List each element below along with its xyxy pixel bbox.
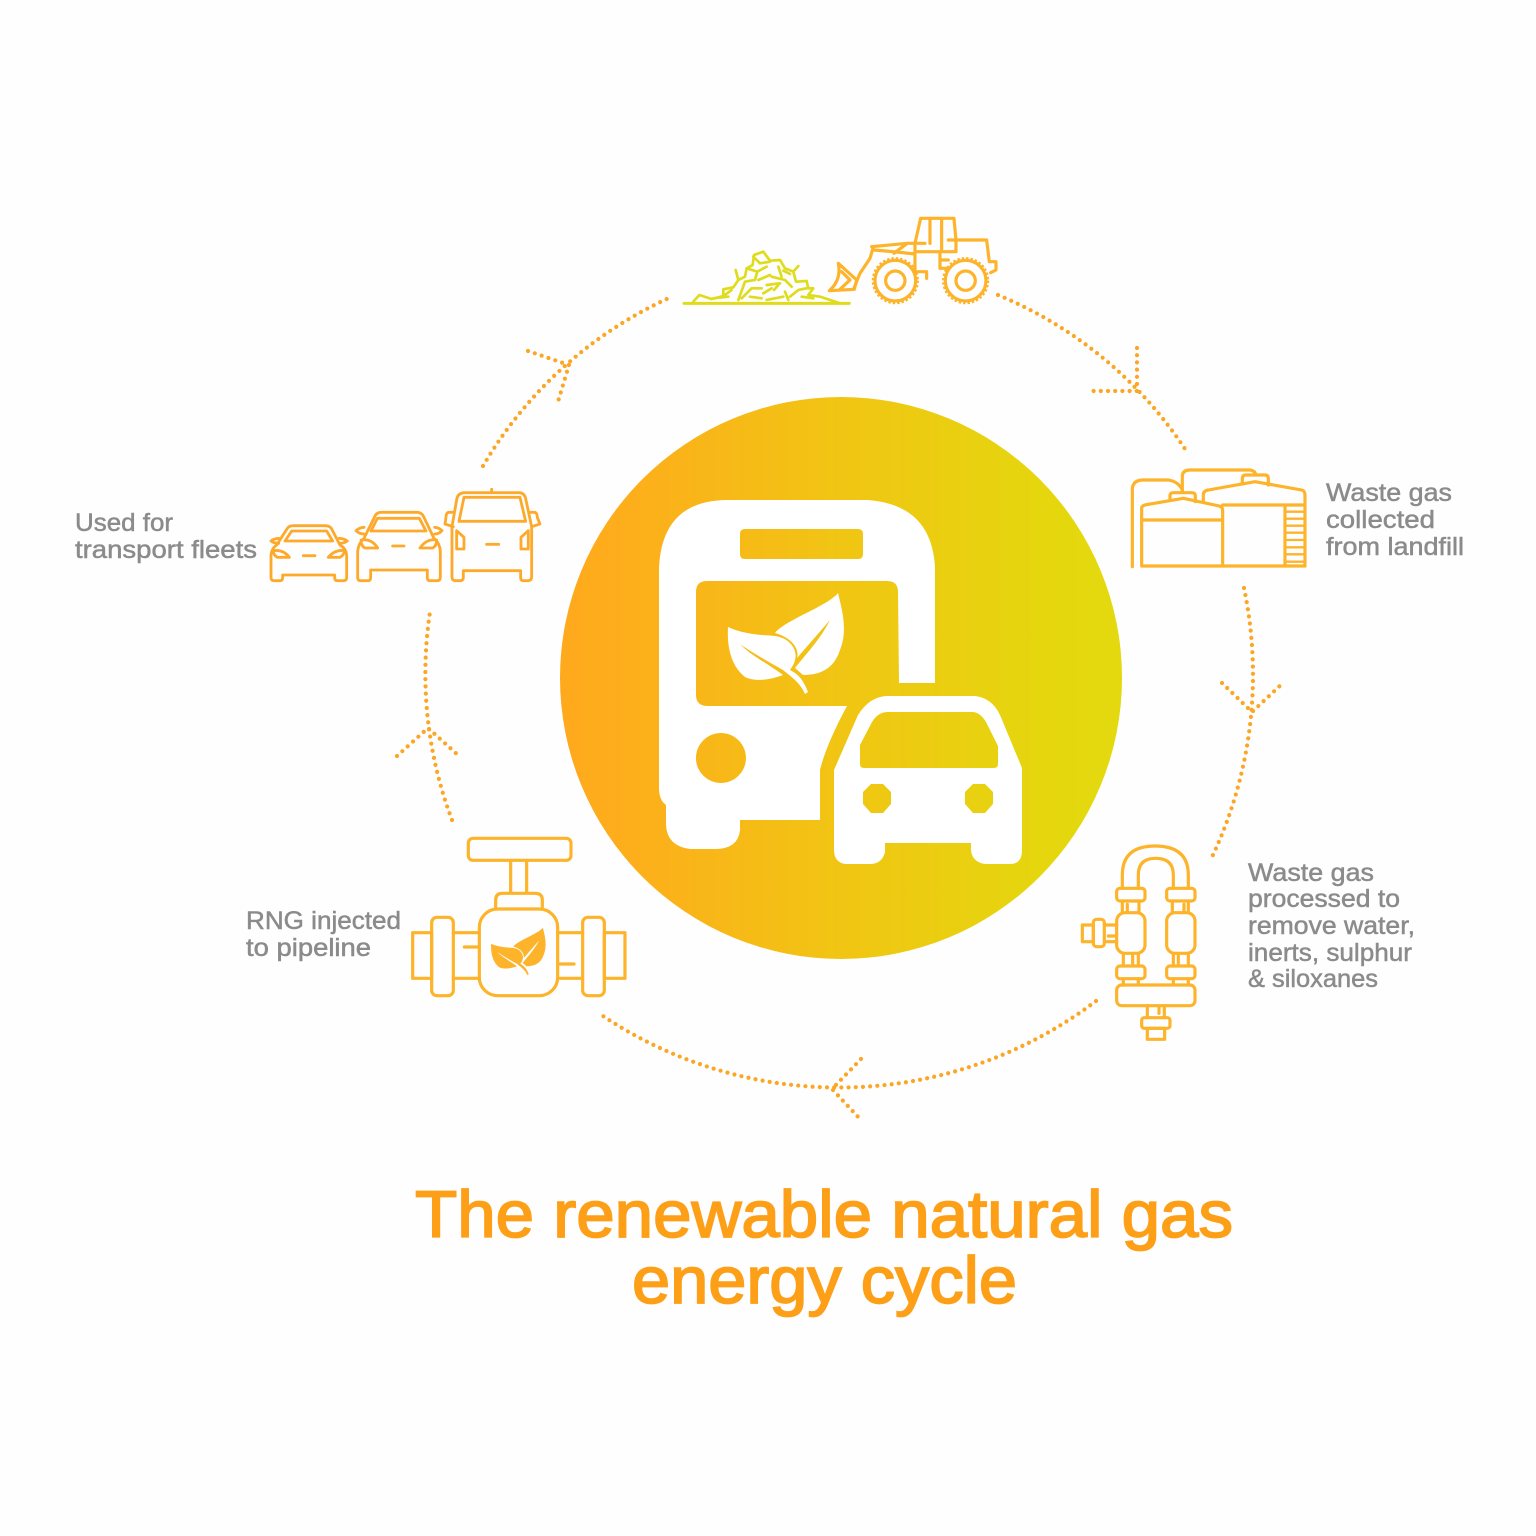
label: waste gas processed: processed to [1248, 885, 1400, 913]
arrow head 3 [832, 1059, 861, 1120]
icon: bus [659, 500, 935, 849]
icon: leaves on bus [728, 593, 844, 694]
icon: gas processing unit [1082, 846, 1195, 1039]
title: The renewable natural gas [415, 1177, 1233, 1251]
dotted arc: fleets to landfill [483, 298, 669, 466]
arrow head 1 [1093, 348, 1137, 391]
icon: leaves on valve [491, 928, 546, 975]
arrow head 4 [397, 728, 459, 756]
label: used for transport fleets: transport fleets [75, 536, 257, 564]
title: energy cycle [632, 1243, 1017, 1317]
label: waste gas collected: from landfill [1326, 533, 1464, 561]
label: used for transport fleets [75, 509, 257, 564]
dotted arc: pipeline to fleets [425, 612, 452, 820]
dotted arc: processing to pipeline [603, 1001, 1096, 1088]
label: waste gas processed [1248, 859, 1415, 993]
dotted arc: plant to processing [1212, 588, 1253, 857]
icon: car [834, 696, 1022, 864]
icon: wheel loader [829, 218, 996, 303]
icon: fleet of vehicles [271, 489, 540, 581]
icon: gas storage tanks [1132, 470, 1305, 567]
label: waste gas processed: inerts, sulphur [1248, 939, 1412, 967]
label: RNG injected: RNG injected [246, 907, 401, 935]
icon: pipeline valve [413, 838, 625, 996]
title [415, 1177, 1233, 1317]
label: waste gas processed: Waste gas [1248, 859, 1374, 887]
arrow head 2 [1222, 682, 1284, 712]
label: waste gas collected: Waste gas [1326, 479, 1452, 507]
label: waste gas collected: collected [1326, 506, 1435, 534]
label: RNG injected: to pipeline [246, 934, 371, 962]
label: RNG injected [246, 907, 401, 962]
icon: waste pile [684, 252, 849, 303]
label: waste gas processed: remove water, [1248, 912, 1415, 940]
arrow head 5 [528, 351, 569, 405]
central gradient circle [560, 397, 1122, 959]
label: waste gas collected [1326, 479, 1464, 561]
label: used for transport fleets: Used for [75, 509, 173, 537]
dotted arc: landfill to plant [998, 295, 1187, 452]
label: waste gas processed: & siloxanes [1248, 965, 1378, 993]
